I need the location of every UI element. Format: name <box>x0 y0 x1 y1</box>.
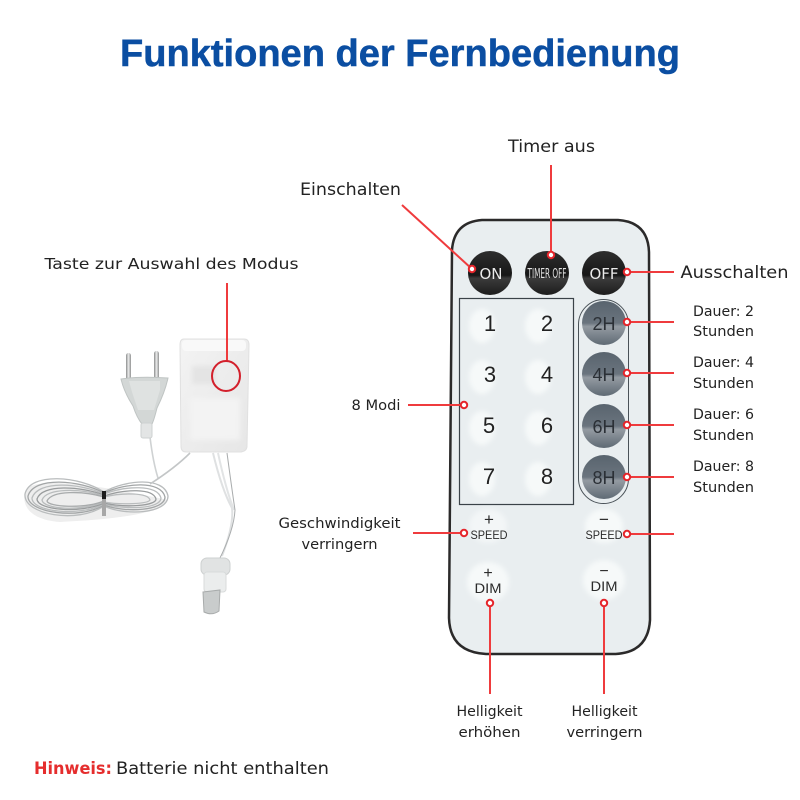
mode number buttons: 4 <box>541 362 553 387</box>
label: increase brightness: Helligkeit <box>456 704 523 720</box>
speed plus button: SPEED <box>470 530 508 542</box>
label: decrease brightness: Helligkeit <box>572 704 638 720</box>
timer button 8H: 8H <box>592 468 616 488</box>
title: Funktionen der Fernbedienung <box>120 33 680 75</box>
wires <box>150 437 235 560</box>
mode number buttons: 8 <box>541 464 553 489</box>
dim plus button: + <box>483 565 493 582</box>
mode number buttons: 1 <box>484 311 496 336</box>
dim minus button: − <box>599 563 609 580</box>
label: 4 hours: Dauer: 4 <box>693 355 754 371</box>
dim minus button <box>583 560 625 600</box>
callout: mode button ring and line <box>212 283 240 391</box>
label: 8 Modi: 8 Modi <box>352 398 400 414</box>
label: decrease speed: verringern <box>302 537 378 553</box>
cable coil <box>24 479 168 522</box>
callout lines <box>402 165 674 694</box>
remote control <box>449 220 650 654</box>
label: mode selection button: Taste zur Auswahl des Modus <box>43 255 298 273</box>
mode number buttons: 2 <box>541 311 553 336</box>
button TIMER OFF: TIMER OFF <box>527 267 566 282</box>
dim plus button <box>467 562 509 602</box>
connector <box>201 558 230 575</box>
timer button 6H <box>582 404 626 448</box>
dim minus button: DIM <box>590 578 618 594</box>
speed minus button <box>585 509 623 543</box>
label: 6 hours: Dauer: 6 <box>693 407 754 423</box>
label: 2 hours: Stunden <box>693 324 754 340</box>
speed minus button: − <box>599 510 609 529</box>
note: Hinweis: <box>34 759 112 779</box>
button OFF: OFF <box>589 265 619 283</box>
label: 6 hours: Stunden <box>693 428 754 444</box>
speed plus button <box>469 509 508 543</box>
button ON: ON <box>479 265 503 283</box>
plug body <box>121 377 168 424</box>
adapter box <box>180 339 249 452</box>
mode number buttons: 6 <box>541 413 553 438</box>
button ON <box>468 251 512 295</box>
button OFF <box>582 251 626 295</box>
label: 4 hours: Stunden <box>693 376 754 392</box>
button TIMER OFF <box>525 251 569 295</box>
speed plus button: + <box>484 510 494 529</box>
label: Einschalten: Einschalten <box>300 180 401 200</box>
timer buttons capsule <box>578 300 628 504</box>
label: 8 hours: Dauer: 8 <box>693 459 754 475</box>
label: 2 hours: Dauer: 2 <box>693 304 754 320</box>
mode number buttons <box>469 309 553 496</box>
speed minus button: SPEED <box>586 530 622 542</box>
photo: power adapter with plug, cable and connector <box>24 339 249 614</box>
mode number buttons: 3 <box>484 362 496 387</box>
mode number buttons: 5 <box>483 413 495 438</box>
label: increase brightness: erhöhen <box>458 725 520 741</box>
label: Timer aus: Timer aus <box>507 137 595 157</box>
timer button 4H <box>582 352 626 396</box>
mode buttons frame <box>460 298 574 504</box>
mode number buttons: 7 <box>483 464 495 489</box>
timer button 2H: 2H <box>592 314 616 334</box>
label: Ausschalten: Ausschalten <box>680 263 788 283</box>
label: 8 hours: Stunden <box>693 480 754 496</box>
remote body <box>449 220 650 654</box>
note: Batterie nicht enthalten <box>116 759 329 779</box>
label: decrease brightness: verringern <box>566 725 642 741</box>
dim plus button: DIM <box>474 580 502 596</box>
timer button 2H <box>582 301 626 345</box>
cable tie <box>102 491 106 499</box>
label: decrease speed: Geschwindigkeit <box>278 516 401 532</box>
timer button 8H <box>582 455 626 499</box>
timer button 6H: 6H <box>592 417 616 437</box>
callout anchor dots <box>461 252 630 606</box>
timer button 4H: 4H <box>592 365 616 385</box>
plug pins <box>126 353 131 380</box>
